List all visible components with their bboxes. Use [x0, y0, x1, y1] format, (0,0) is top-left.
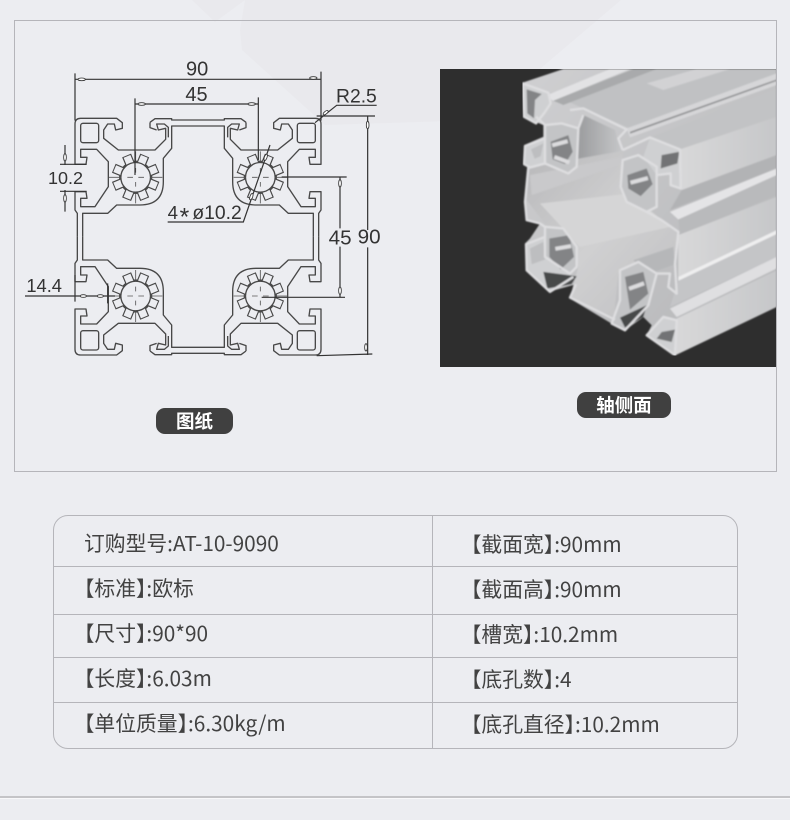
- right side faces: [670, 117, 777, 355]
- dimension lines and labels: 45: [185, 84, 208, 106]
- spec: standard: 【标准】:欧标: [84, 572, 194, 602]
- technical drawing: [25, 58, 381, 356]
- background decoration: [0, 0, 790, 200]
- row and column dividers: [54, 516, 737, 748]
- panel: drawing and photo frame: [14, 20, 777, 472]
- bottom divider: [0, 796, 790, 798]
- dimension lines and labels: 10.2: [48, 168, 83, 188]
- spec: slot width: 【槽宽】:10.2mm: [471, 618, 618, 648]
- spec: length: 【长度】:6.03m: [84, 662, 212, 692]
- profile cross-section: [75, 118, 321, 355]
- dimension lines and labels: 4: [168, 202, 178, 223]
- spec: section height: 【截面高】:90mm: [471, 573, 622, 603]
- label: side view: 轴侧面: [596, 392, 652, 418]
- light teeth: [530, 139, 648, 291]
- aluminium body: [523, 69, 777, 355]
- dimension lines and labels: [25, 58, 381, 356]
- dimension lines and labels: 14.4: [26, 275, 62, 296]
- dimension lines and labels: R2.5: [336, 86, 377, 107]
- specification table: [53, 515, 738, 749]
- cut section edges: [523, 83, 681, 355]
- dimension lines and labels: 90: [186, 58, 208, 80]
- top surfaces: [545, 69, 777, 149]
- label: drawing: [156, 408, 233, 434]
- inner cavities: [527, 115, 678, 317]
- dimension lines and labels: *: [180, 204, 190, 231]
- dimension lines and labels: 90: [358, 226, 381, 249]
- spec: hole count: 【底孔数】:4: [471, 663, 572, 693]
- spec: order model: 订购型号:AT-10-9090: [84, 527, 279, 557]
- dimension lines and labels: ø10.2: [192, 203, 242, 224]
- photo: aluminium profile on dark background: [440, 69, 776, 367]
- spec: unit mass: 【单位质量】:6.30kg/m: [84, 707, 286, 737]
- dimension lines and labels: 45: [329, 226, 352, 249]
- hub recess fills: [523, 83, 681, 355]
- dark recesses: [527, 89, 679, 342]
- label: drawing: 图纸: [176, 408, 213, 434]
- label: side view: [577, 392, 671, 418]
- spec: size: 【尺寸】:90*90: [84, 617, 208, 647]
- spec: section width: 【截面宽】:90mm: [471, 528, 622, 558]
- spec: hole diameter: 【底孔直径】:10.2mm: [471, 708, 660, 738]
